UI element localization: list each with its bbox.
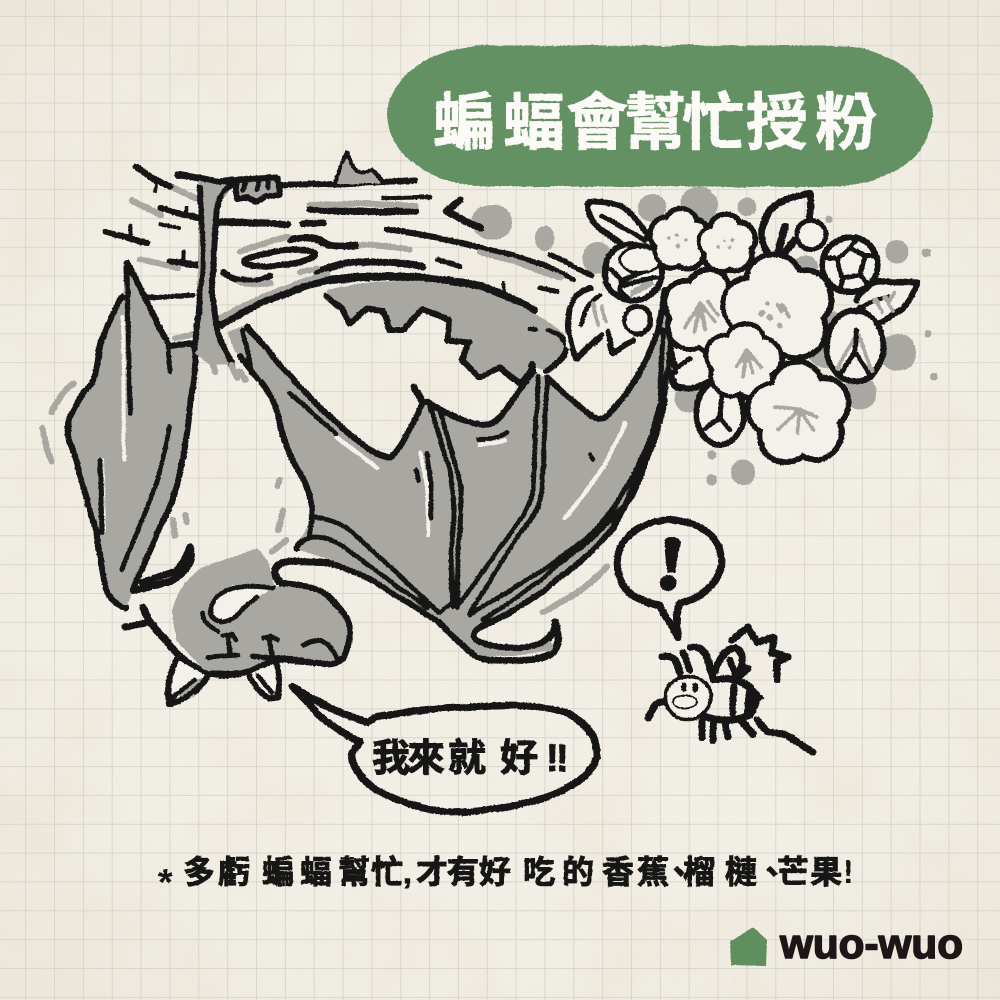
bat thumb claw at wrist and forearm [275,561,559,660]
bee wings [690,647,743,680]
branch gray shading [132,187,560,338]
bud small circle left [624,307,650,333]
logo [730,920,963,967]
wing motion lines [42,384,74,462]
bud right oval [827,311,883,381]
title text: 蝙蝠會幫忙授粉 [433,89,877,158]
bee head [666,677,710,719]
bee flight trail [757,720,813,752]
bud lower left [697,382,743,444]
bat face marks [228,638,230,655]
speech bubble: bat [293,687,597,812]
bee body [700,679,755,720]
caption [158,854,854,904]
bat body edge and fur [173,330,312,552]
flower big D [720,251,835,364]
flower big C [660,267,750,355]
leaf top right [762,193,810,253]
bat [42,178,672,703]
bat right wing membrane [228,290,672,660]
bud left [605,244,661,300]
flower bottom F [748,362,850,461]
branch ink lines [105,153,592,325]
speech bubble: exclamation [617,520,721,637]
bat left folded wing [68,263,196,608]
bee [648,627,813,752]
leaf lower left [566,288,640,358]
bat ears [168,660,207,703]
bud right round [823,238,877,292]
finger bones [430,407,454,607]
bat head [125,549,350,703]
bud small circle top [797,221,825,249]
flowers cluster [566,193,917,461]
gray ink blots behind flowers [472,187,938,485]
logo house icon [730,927,767,966]
bat leg gripping branch [195,178,279,380]
title banner [388,46,932,186]
flower small A [651,210,709,267]
flower middle E [705,323,781,397]
bat speech text: 我來就好!! [372,738,569,780]
bee limbs and antennae [648,653,690,718]
leaf right [857,282,917,322]
tree branch [105,153,592,338]
caption: ! [843,854,854,890]
foreground leaf silhouette under branch [327,282,566,383]
exclamation mark [665,537,680,572]
flower small partial [672,348,712,388]
flower small B [699,215,755,270]
bat eye patch [210,585,272,622]
logo wordmark: wuo-wuo [779,920,963,967]
caption: * [158,862,173,904]
thumb claw [132,547,191,590]
wing highlights [420,453,428,535]
bee surprise burst [732,627,788,680]
caption: 多虧蝙蝠幫忙,才有好吃的香蕉、榴槤、芒果 [183,854,842,890]
leaf top left [588,202,650,243]
